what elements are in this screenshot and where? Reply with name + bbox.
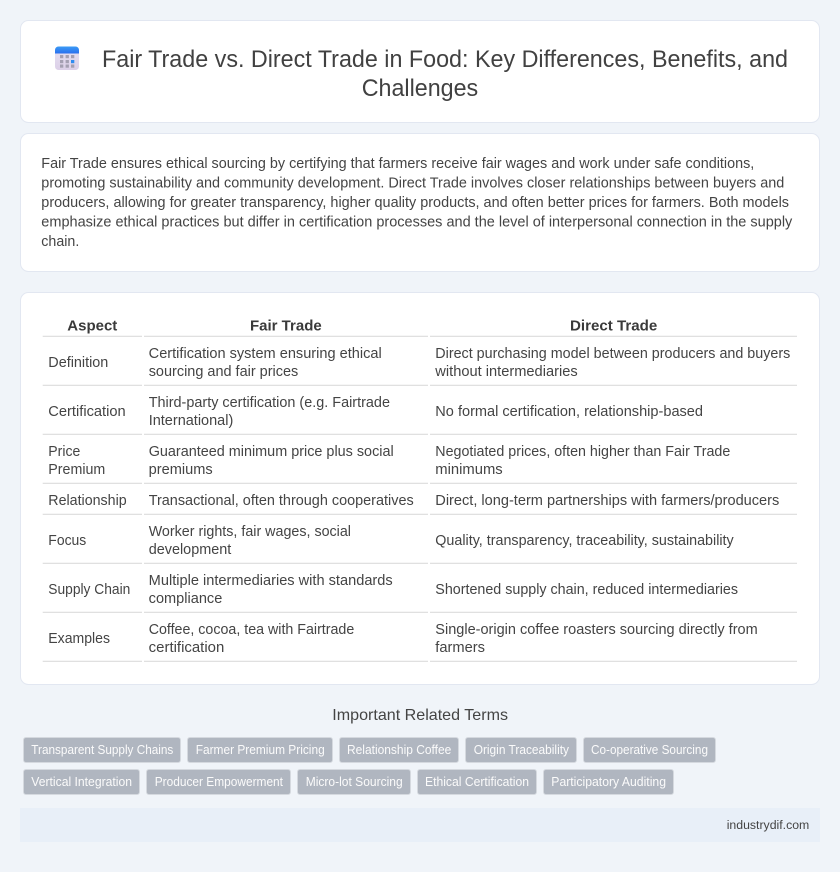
table header row: Aspect <box>67 318 117 334</box>
row: Focus: Worker rights, fair wages, social <box>149 524 351 540</box>
row: Focus: development <box>149 542 231 558</box>
row: Relationship: Relationship <box>48 493 127 509</box>
row: Examples: certification <box>149 640 224 656</box>
title: Challenges <box>362 75 478 102</box>
row: Price Premium <box>48 444 730 478</box>
tag: Relationship Coffee <box>340 738 458 762</box>
tag: Origin Traceability: Origin Traceability <box>474 743 570 757</box>
row: Relationship <box>48 493 779 509</box>
tag: Co-operative Sourcing: Co-operative Sourcing <box>591 743 708 757</box>
row: Definition: Definition <box>48 355 108 371</box>
row: Definition <box>48 346 790 380</box>
row: Supply Chain: Shortened supply chain, reduced intermediaries <box>435 582 738 598</box>
tag: Micro-lot Sourcing: Micro-lot Sourcing <box>306 775 403 789</box>
text block: summary: promoting sustainability and community development. Direct Trade involves closer relationships between buyers and <box>41 176 784 192</box>
tag: Relationship Coffee: Relationship Coffee <box>347 743 451 757</box>
tag: Vertical Integration: Vertical Integration <box>31 775 132 789</box>
table header row <box>67 318 657 334</box>
row: Focus <box>48 524 734 558</box>
row: Price Premium: Negotiated prices, often higher than Fair Trade <box>435 444 730 460</box>
row: Price Premium: minimums <box>435 462 503 478</box>
text block: summary: Fair Trade ensures ethical sourcing by certifying that farmers receive fair wages and work under safe conditions, <box>41 156 754 172</box>
tag: Vertical Integration <box>24 770 140 794</box>
tag: Ethical Certification <box>418 770 536 794</box>
row: Definition: without intermediaries <box>434 364 578 380</box>
panel: header <box>20 20 820 122</box>
table header row: Direct Trade <box>570 318 657 334</box>
row: Certification: Third-party certification (e.g. Fairtrade <box>149 395 390 411</box>
row: Relationship: Transactional, often through cooperatives <box>149 493 414 509</box>
panel: comparison table <box>20 292 820 684</box>
row: Examples: Examples <box>48 631 110 647</box>
row: Definition: Direct purchasing model between producers and buyers <box>435 346 790 362</box>
row: Focus: Quality, transparency, traceability, sustainability <box>435 533 734 549</box>
table header row: Fair Trade <box>250 318 322 334</box>
footer <box>20 808 820 842</box>
row: Examples: Coffee, cocoa, tea with Fairtrade <box>149 622 354 638</box>
text block: summary: chain. <box>41 234 79 250</box>
tag: Transparent Supply Chains: Transparent Supply Chains <box>31 743 173 757</box>
row: Examples: farmers <box>435 640 485 656</box>
text block: summary: emphasize ethical practices but differ in certification processes and the level of interpersonal connection in the supply <box>41 214 793 230</box>
tag: Producer Empowerment <box>146 770 290 794</box>
row: Supply Chain <box>48 573 738 607</box>
text block: summary: producers, allowing for greater transparency, higher quality products, and often better prices for farmers. Both models <box>41 195 789 211</box>
tag: Origin Traceability <box>466 738 576 762</box>
row: Definition: sourcing and fair prices <box>149 364 298 380</box>
row: Examples <box>48 622 758 656</box>
tag: Co-operative Sourcing <box>584 738 716 762</box>
row: Relationship: Direct, long-term partnerships with farmers/producers <box>435 493 779 509</box>
row: Definition: Certification system ensuring ethical <box>149 346 382 362</box>
row: Certification: Certification <box>48 404 126 420</box>
tag: Farmer Premium Pricing <box>188 738 332 762</box>
row: Price Premium: premiums <box>149 462 213 478</box>
tag: Producer Empowerment: Producer Empowerment <box>155 775 283 789</box>
row: Examples: Single-origin coffee roasters sourcing directly from <box>435 622 758 638</box>
row: Focus: Focus <box>48 533 86 549</box>
row: Price Premium: Premium <box>48 462 105 478</box>
related terms tags <box>24 738 716 794</box>
tag: Ethical Certification: Ethical Certification <box>425 775 529 789</box>
tag: Farmer Premium Pricing: Farmer Premium Pricing <box>196 743 325 757</box>
row: Supply Chain: Multiple intermediaries with standards <box>149 573 393 589</box>
row: Supply Chain: compliance <box>149 591 222 607</box>
title: Fair Trade vs. Direct Trade in Food: Key Differences, Benefits, and <box>102 46 788 73</box>
row: Certification: International) <box>149 413 233 429</box>
panel: summary paragraph <box>20 134 820 272</box>
row: Certification: No formal certification, relationship-based <box>435 404 703 420</box>
tag: Transparent Supply Chains <box>24 738 180 762</box>
tag: Micro-lot Sourcing <box>298 770 410 794</box>
title <box>102 46 788 102</box>
text block: summary <box>41 156 793 250</box>
row: Price Premium: Guaranteed minimum price plus social <box>149 444 394 460</box>
tag: Participatory Auditing <box>544 770 674 794</box>
footer: industrydif.com <box>727 818 809 832</box>
heading: related terms: Important Related Terms <box>332 707 508 724</box>
row: Certification <box>48 395 703 429</box>
tag: Participatory Auditing: Participatory Auditing <box>551 775 666 789</box>
row: Supply Chain: Supply Chain <box>48 582 130 598</box>
row: Price Premium: Price <box>48 444 80 460</box>
icon: calendar <box>55 46 79 70</box>
